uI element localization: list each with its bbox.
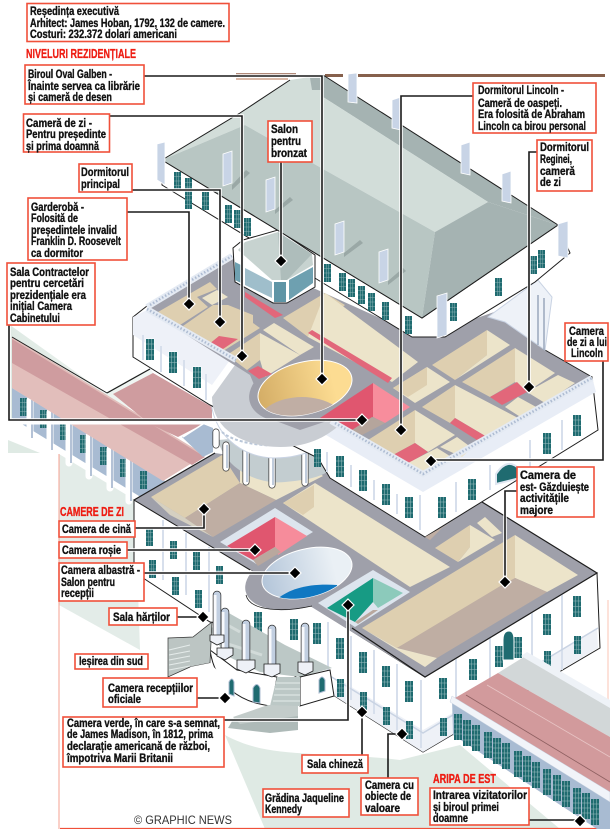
long room with red stripe [245, 292, 418, 383]
label: Ieșirea din sud [75, 654, 148, 669]
heading: Aripa de est: ARIPA DE EST [433, 771, 496, 786]
leader: Camera cu obiecte de valoare [388, 728, 408, 778]
leader: Sala Contractelor [9, 325, 368, 426]
lower-floor wall windows [146, 528, 582, 739]
text box: Reședința executivă: Reședința executivă [30, 6, 119, 18]
label: Biroul Oval Galben: Biroul Oval Galben - [28, 69, 112, 81]
west wing colonnade [12, 337, 213, 512]
label: Camera albastră: recepții [61, 588, 94, 600]
heading: Niveluri rezidențiale: NIVELURI REZIDENȚIALE [26, 46, 136, 61]
leader: Garderobă [127, 212, 195, 310]
label: Ieșirea din sud: Ieșirea din sud [79, 656, 143, 668]
leader: Dormitorul Reginei [523, 152, 537, 393]
label: Biroul Oval Galben: Înainte servea ca librărie [27, 80, 140, 93]
small east rooms [435, 517, 502, 562]
west stairs [168, 622, 212, 677]
label: Cameră de zi: Pentru președinte [26, 129, 106, 141]
label: Dormitorul Lincoln [473, 83, 596, 133]
label: Camera de est [517, 467, 594, 517]
label: Camera de zi a lui Lincoln: Camera [569, 326, 604, 338]
roof [157, 73, 568, 338]
label: Camera de est: est- Găzduiește [520, 482, 589, 494]
label: Camera de est: Camera de [520, 470, 576, 482]
arched doors [229, 677, 325, 703]
north-east portico [488, 280, 552, 350]
label: Camera cu obiecte de valoare: valoare [365, 803, 400, 815]
portico columns [210, 595, 313, 677]
rotunda colonnade [211, 395, 345, 485]
leader: Camera roșie [127, 544, 261, 556]
upper floor: walls [133, 306, 598, 540]
label: Dormitorul Reginei: de zi [540, 177, 561, 189]
label: Camera verde: împotriva Marii Britanii [66, 753, 173, 765]
label: Camera verde: declarație americană de război, [67, 741, 210, 753]
label: Camera de zi a lui Lincoln [565, 323, 608, 361]
label: Camera recepțiilor oficiale: oficiale [108, 694, 141, 706]
label: Sala hărților [109, 608, 177, 625]
leader: Camera albastră [144, 567, 301, 579]
label: Sala Contractelor [7, 263, 95, 325]
label: Camera roșie: Camera roșie [62, 545, 121, 557]
upper-left rooms [183, 305, 314, 379]
leader: Intrarea vizitatorilor [529, 815, 586, 827]
label: Garderobă: președintele invalid [31, 225, 117, 237]
parapets [147, 256, 592, 474]
roof wall [162, 160, 570, 337]
label: Dormitorul principal [79, 164, 132, 192]
label: Sala chineză [302, 755, 368, 773]
red room [220, 508, 313, 566]
east wing windows [454, 714, 599, 825]
label: Camera recepțiilor oficiale [103, 678, 197, 707]
text box: Reședința executivă [27, 4, 229, 42]
label: Salon pentru bronzat: bronzat [271, 148, 307, 160]
label: Camera verde [63, 717, 224, 767]
label: Intrarea vizitatorilor [430, 788, 529, 825]
label: Salon pentru bronzat: pentru [271, 136, 301, 148]
top strip [236, 73, 605, 80]
ground-floor bay [210, 650, 277, 706]
upper windows [146, 338, 582, 518]
label: Garderobă: Franklin D. Roosevelt [31, 236, 121, 248]
label: Camera albastră: Salon pentru [61, 577, 115, 589]
label: Dormitorul Reginei: Dormitorul [540, 142, 589, 154]
label: Camera de est: majore [520, 505, 553, 517]
leader: Cameră de zi [109, 116, 248, 362]
upper floor plan [147, 255, 592, 475]
label: Camera de cină [59, 521, 135, 537]
label: Garderobă: Garderobă - [31, 202, 84, 214]
label: Sala hărților: Sala hărților [113, 612, 170, 624]
lower floor plan [134, 453, 597, 677]
central and east upper rooms [368, 330, 575, 475]
label: Sala Contractelor: Cabinetului [10, 313, 60, 325]
label: Garderobă [28, 198, 127, 260]
dining room [151, 455, 323, 537]
label: Sala Contractelor: pentru cercetări [10, 278, 84, 290]
east wing [450, 652, 610, 829]
label: Camera cu obiecte de valoare: obiecte de [365, 791, 411, 803]
label: Grădina Jaqueline Kennedy [263, 789, 349, 817]
label: Biroul Oval Galben [25, 65, 144, 104]
label: Dormitorul Lincoln: Era folosită de Abraham [478, 109, 585, 121]
leader: Camera de cină [135, 503, 210, 528]
rotunda top [212, 358, 345, 447]
label: Garderobă: Folosită de [31, 213, 78, 225]
long east room [283, 483, 450, 587]
green room [318, 570, 410, 627]
label: Camera verde: Camera verde, în care s-a semnat, [67, 718, 220, 730]
label: Grădina Jaqueline Kennedy: Grădina Jaqueline [265, 793, 344, 805]
south stairs [270, 677, 300, 706]
label: Sala Contractelor: inițial Camera [10, 301, 72, 313]
lower floor: walls [134, 500, 600, 752]
south portico [168, 580, 334, 733]
label: Dormitorul Lincoln: Cameră de oaspeți. [478, 98, 562, 110]
red rule lines at page edges [59, 454, 610, 829]
label: Cameră de zi: și prima doamnă [26, 141, 99, 153]
label: Dormitorul Lincoln: Dormitorul Lincoln - [478, 85, 564, 97]
leader: Sala hărților [177, 611, 209, 623]
label: Biroul Oval Galben: și cameră de desen [28, 92, 112, 104]
label: Salon pentru bronzat: Salon [271, 124, 298, 136]
leader: Biroul Oval Galben [144, 76, 328, 385]
label: Dormitorul Reginei [537, 140, 592, 191]
label: Sala Contractelor: Sala Contractelor [10, 267, 89, 279]
leader: Salon pentru bronzat [275, 162, 287, 267]
blue oval room [262, 546, 352, 600]
leader: Camera de est [499, 491, 517, 588]
label: Camera cu obiecte de valoare [361, 778, 418, 815]
label: Grădina Jaqueline Kennedy: Kennedy [265, 804, 302, 816]
text box: Reședința executivă: Costuri: 232.372 dolari americani [30, 29, 177, 41]
leader: Sala chineză [356, 706, 368, 755]
label: Garderobă: ca dormitor [31, 248, 83, 260]
leader: Camera de zi a lui Lincoln [425, 361, 603, 467]
label: Salon pentru bronzat [268, 121, 312, 162]
label: Cameră de zi: Cameră de zi - [26, 118, 92, 130]
yellow oval room [258, 360, 352, 416]
label: Camera cu obiecte de valoare: Camera cu [365, 780, 414, 792]
text box: Reședința executivă: Arhitect: James Hoban, 1792, 132 de camere. [30, 18, 225, 30]
label: Camera albastră: Camera albastră - [61, 565, 140, 577]
label: Dormitorul Reginei: Reginei, [540, 154, 572, 166]
lower ledge [228, 706, 298, 733]
heading: Camere de zi: CAMERE DE ZI [60, 504, 124, 519]
bow window [233, 230, 315, 303]
frame band under upper floor [9, 422, 214, 424]
leader: Camera recepțiilor oficiale [197, 692, 231, 704]
leader: Dormitorul principal [132, 190, 226, 328]
label: Intrarea vizitatorilor: și biroul primei [433, 802, 499, 814]
label: Dormitorul principal: principal [81, 179, 120, 191]
label: Camera albastră [59, 563, 144, 601]
label: Sala chineză: Sala chineză [307, 759, 363, 771]
east room [362, 535, 578, 667]
label: Intrarea vizitatorilor: doamne [433, 813, 468, 825]
label: Cameră de zi [24, 114, 110, 153]
label: Camera de cină: Camera de cină [62, 524, 131, 536]
label: Dormitorul Reginei: cameră [540, 166, 576, 178]
label: Camera roșie [59, 542, 127, 558]
chimneys [157, 73, 568, 338]
leader: Dormitorul Lincoln [395, 96, 473, 436]
label: Camera recepțiilor oficiale: Camera recepțiilor [108, 683, 193, 695]
red upper room [320, 383, 410, 435]
credit: © GRAPHIC NEWS [134, 813, 232, 827]
leader: Camera verde [224, 599, 354, 720]
label: Camera de est: activitățile [520, 493, 569, 505]
label: Dormitorul principal: Dormitorul [81, 167, 129, 179]
ground: pale green patches [8, 325, 560, 829]
label: Camera verde: de James Madison, în 1812, prima [67, 729, 213, 741]
label: Intrarea vizitatorilor: Intrarea vizitatorilor [433, 790, 527, 802]
label: Sala Contractelor: prezidențiale era [10, 290, 87, 302]
